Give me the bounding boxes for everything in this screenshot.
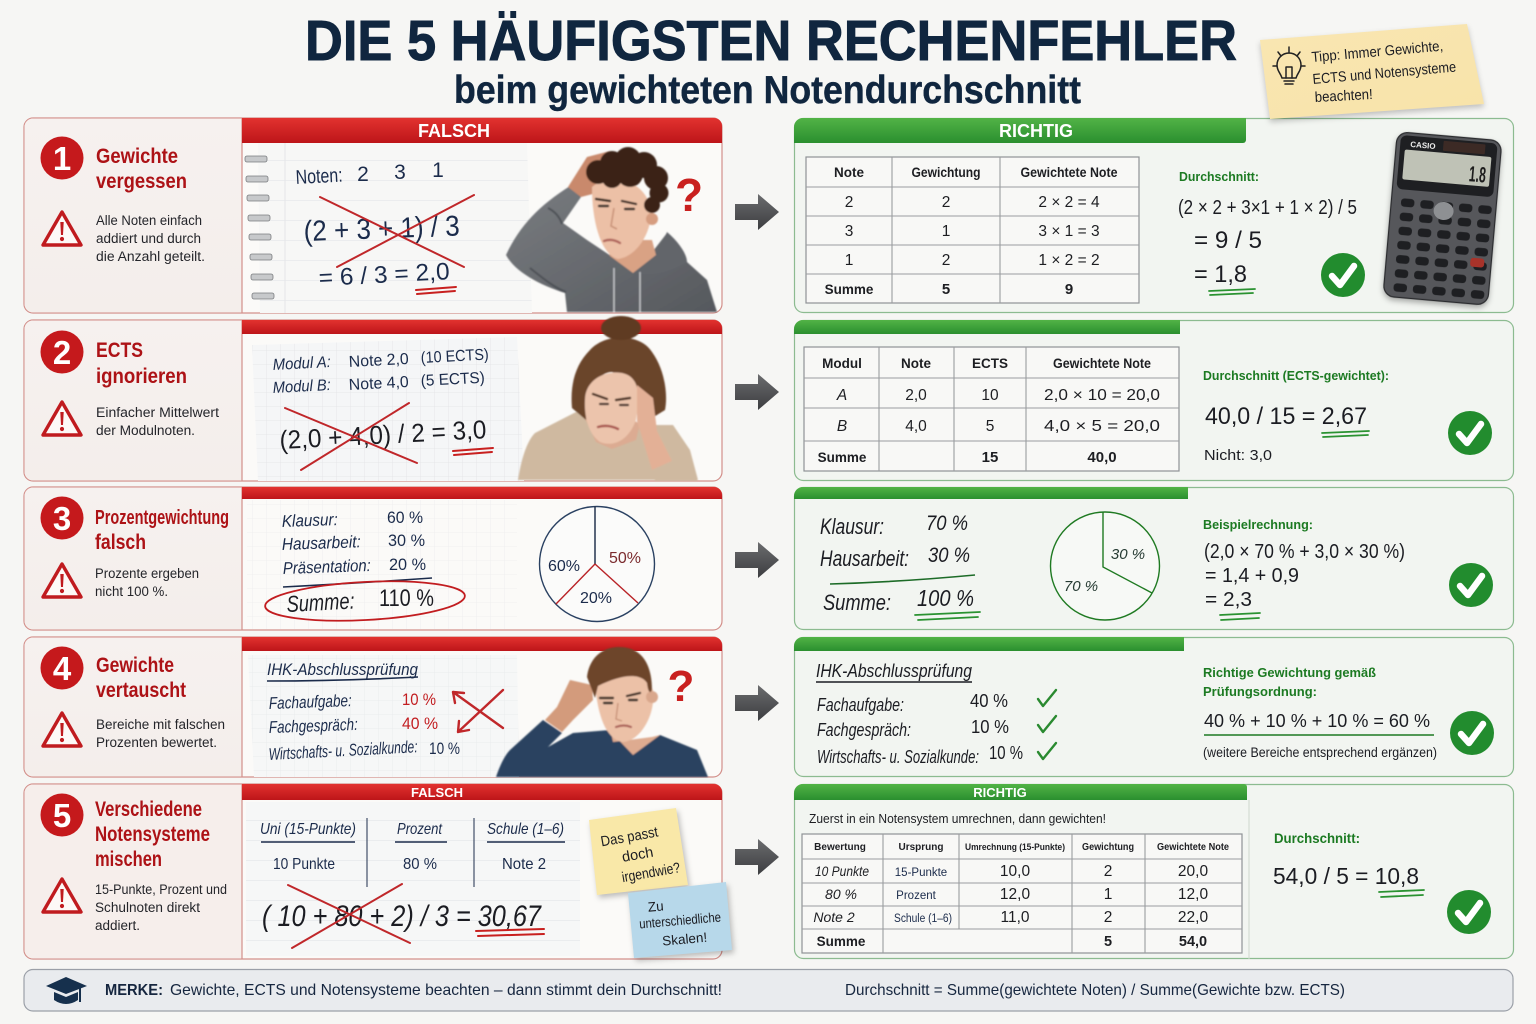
notebook 1: = 6 / 3 = 2,0 [318, 258, 450, 292]
heading 2 [96, 339, 187, 388]
richtig header 1 [794, 118, 1246, 143]
question mark 1: ? [675, 169, 703, 221]
icon: check 3 [1449, 563, 1493, 607]
heading 1: vergessen [96, 170, 187, 193]
calculation 3: = 1,4 + 0,9 [1205, 565, 1299, 587]
table 5: 10,0 [1000, 863, 1030, 880]
icon: warning 1 [43, 212, 81, 245]
calculation 5: Durchschnitt: [1274, 830, 1360, 846]
heading 1: Gewichte [96, 145, 178, 168]
falsch header 5: FALSCH [411, 785, 463, 800]
sticky note blue: unterschiedliche [639, 909, 722, 932]
sticky note yellow: doch [621, 845, 655, 866]
description 5 [95, 882, 227, 933]
table 2: 4,0 × 5 = 20,0 [1044, 418, 1160, 435]
note paper 2: (2,0 + 4,0) / 2 = 3,0 [279, 414, 487, 455]
heading 4 [96, 654, 186, 702]
panel: error 1 [24, 118, 722, 313]
table 5: 2 [1104, 909, 1112, 926]
calculation 4: Prüfungsordnung: [1203, 684, 1317, 699]
calculation 5 [1273, 830, 1424, 897]
mixed systems note: 80 % [403, 856, 437, 873]
description 4: Bereiche mit falschen [96, 717, 225, 732]
weights list 3: 20 % [389, 555, 426, 574]
icon: warning 5 [43, 879, 81, 912]
table 2: Modul [822, 356, 862, 371]
description 5: Schulnoten direkt [95, 900, 200, 915]
calculation 2: Nicht: 3,0 [1204, 447, 1272, 464]
table 2: ECTS [972, 356, 1008, 371]
exam weights wrong: IHK-Abschlussprüfung [267, 660, 418, 679]
heading 5: Verschiedene [95, 798, 202, 821]
notebook 1 [245, 143, 532, 313]
weights list 3: 30 % [388, 531, 425, 550]
mixed systems note: ( 10 + 80 + 2) / 3 = 30,67 [262, 900, 542, 933]
heading 5: mischen [95, 848, 162, 871]
number badge 4: 4 [53, 650, 72, 687]
description 4 [96, 717, 225, 750]
sticky note blue [628, 882, 732, 958]
correct weights list: Klausur: [820, 514, 884, 539]
exam weights wrong: Wirtschafts- u. Sozialkunde: [268, 737, 418, 764]
correct weights list: Summe: [823, 590, 891, 615]
number badge 4 [40, 646, 84, 690]
table 5: 1 [1104, 886, 1112, 903]
table 1: Note [834, 165, 864, 180]
table 2: 4,0 [905, 418, 927, 435]
icon: check 1 [1321, 253, 1365, 297]
calculation 1: = 1,8 [1194, 261, 1247, 288]
table 1 [806, 157, 1139, 303]
calculation 1 [1178, 169, 1357, 295]
richtig header 5 [794, 784, 1247, 800]
mixed systems note: Uni (15-Punkte) [260, 821, 356, 838]
exam weights correct: Fachaufgabe: [817, 695, 904, 715]
exam weights correct [816, 661, 1056, 767]
calculation 1: (2 × 2 + 3×1 + 1 × 2) / 5 [1178, 197, 1357, 219]
note paper 2: Note 2,0 [348, 351, 409, 371]
calculation 2: 40,0 / 15 = 2,67 [1205, 403, 1367, 430]
table 5: Schule (1–6) [894, 913, 952, 925]
sticky note yellow: irgendwie? [621, 860, 681, 886]
calculator [1383, 132, 1502, 305]
table 1: Summe [825, 282, 874, 297]
heading 4: Gewichte [96, 654, 174, 677]
note paper 2 [252, 337, 524, 481]
notebook 1: (2 + 3 + 1) / 3 [303, 211, 460, 248]
pie chart wrong: 50% [609, 550, 641, 567]
table 1: 2 [845, 194, 853, 211]
weights list 3: Summe: [286, 587, 355, 617]
table 5 [802, 834, 1242, 953]
arrow 5 [735, 839, 779, 875]
correct weights list: 100 % [917, 585, 974, 611]
note paper 2: (5 ECTS) [420, 370, 485, 390]
tip sticky note: beachten! [1314, 87, 1373, 106]
table 1: 3 [845, 223, 853, 240]
table 5: 2 [1104, 863, 1112, 880]
description 5: addiert. [95, 918, 140, 933]
correct weights list [820, 512, 980, 620]
formula: Durchschnitt = Summe(gewichtete Noten) / Summe(Gewichte bzw. ECTS) [845, 982, 1345, 999]
calculation 3 [1203, 517, 1405, 620]
takeaway text: MERKE: [105, 982, 163, 999]
icon: check 4 [1450, 711, 1494, 755]
table 5: Summe [817, 934, 866, 949]
title: DIE 5 HÄUFIGSTEN RECHENFEHLER [305, 9, 1237, 73]
sticky note blue: Skalen! [662, 930, 708, 949]
number badge 2 [40, 330, 84, 374]
tip sticky note: ECTS und Notensysteme [1312, 59, 1457, 88]
tip sticky note: Tipp: Immer Gewichte, [1311, 39, 1444, 66]
title [305, 9, 1237, 112]
heading 3 [95, 507, 229, 554]
richtig header 1: RICHTIG [999, 121, 1073, 141]
description 1: die Anzahl geteilt. [96, 249, 205, 264]
correct weights list: Hausarbeit: [820, 546, 909, 571]
table 5: 80 % [825, 886, 857, 902]
calculation 4: (weitere Bereiche entsprechend ergänzen) [1203, 745, 1437, 760]
table 1: 1 × 2 = 2 [1038, 252, 1100, 269]
description 3 [95, 566, 199, 599]
falsch header 5 [242, 784, 722, 800]
arrow 3 [735, 542, 779, 578]
question mark 4: ? [668, 662, 694, 711]
table 5: Note 2 [813, 909, 855, 925]
heading 1 [96, 145, 187, 193]
red bar 3 [242, 487, 722, 499]
mixed systems note: 10 Punkte [273, 856, 335, 873]
table 1: 5 [942, 281, 950, 298]
table 1: 9 [1065, 281, 1073, 298]
panel: error 4 [24, 637, 722, 777]
icon: warning 4 [43, 713, 81, 746]
mixed systems note: Note 2 [502, 856, 546, 873]
calculation 4 [1203, 665, 1437, 760]
table 2: 15 [982, 449, 998, 466]
notebook 1: Noten: [295, 165, 343, 189]
calculator: CASIO [1410, 140, 1436, 151]
description 2: Einfacher Mittelwert [96, 405, 219, 420]
heading 5: Notensysteme [95, 823, 210, 846]
table 2: 5 [986, 418, 994, 435]
exam weights correct: 10 % [971, 717, 1009, 737]
panel: solution 5 [794, 784, 1514, 959]
title: beim gewichteten Notendurchschnitt [454, 69, 1081, 112]
number badge 1 [40, 136, 84, 180]
correct weights list: 30 % [928, 544, 970, 567]
tip sticky note [1260, 24, 1484, 119]
number badge 5 [40, 794, 84, 836]
arrow 2 [735, 374, 779, 410]
calculation 3: Beispielrechnung: [1203, 517, 1313, 532]
description 3: nicht 100 %. [95, 584, 168, 599]
table 1: 2 × 2 = 4 [1038, 194, 1100, 211]
table 2: 40,0 [1087, 449, 1117, 466]
person: confused man scratching head [496, 647, 708, 777]
icon: graduation cap [46, 977, 87, 1004]
table 5: 11,0 [1000, 909, 1030, 926]
panel: error 2 [24, 316, 722, 481]
sticky note blue: Zu [647, 898, 664, 915]
green bar 4 [794, 637, 1184, 651]
notebook 1: 1 [432, 159, 444, 182]
table 5: Gewichtete Note [1157, 842, 1229, 853]
calculation 4: 40 % + 10 % + 10 % = 60 % [1204, 711, 1430, 731]
note paper 2: Note 4,0 [348, 374, 409, 394]
notebook 1: 2 [357, 163, 369, 186]
table 1: 1 [845, 252, 853, 269]
table 2: A [836, 387, 847, 404]
note paper 2: (10 ECTS) [420, 346, 489, 367]
table 5: 5 [1104, 934, 1112, 950]
sticky note yellow [589, 808, 688, 895]
note paper 2: Modul A: [272, 354, 331, 374]
table 2 [804, 347, 1179, 471]
panel: solution 1 [794, 118, 1514, 312]
description 2 [96, 405, 219, 438]
arrow 1 [735, 194, 779, 230]
panel: solution 3 [794, 487, 1514, 630]
pie chart correct: 30 % [1111, 546, 1145, 563]
table 5: 12,0 [1178, 886, 1208, 903]
exam weights wrong: Fachaufgabe: [268, 691, 352, 713]
exam weights wrong: 10 % [429, 739, 460, 758]
weights list 3: Hausarbeit: [281, 532, 361, 554]
person: frustrated woman with hair bun [518, 316, 698, 481]
exam weights wrong: 40 % [402, 714, 438, 733]
number badge 3 [40, 496, 84, 540]
number badge 1: 1 [53, 140, 71, 177]
table 2: Summe [818, 450, 867, 465]
exam weights correct: Fachgespräch: [817, 720, 911, 740]
exam weights correct: Wirtschafts- u. Sozialkunde: [817, 747, 979, 767]
description 3: Prozente ergeben [95, 566, 199, 581]
person: confused young man in hoodie [506, 147, 717, 312]
weights list 3: 60 % [387, 508, 423, 527]
pie chart wrong: 20% [580, 590, 612, 607]
calculation 3: (2,0 × 70 % + 3,0 × 30 %) [1204, 541, 1405, 563]
mixed systems note [246, 802, 580, 956]
number badge 2: 2 [53, 334, 71, 371]
table 1: 2 [942, 252, 950, 269]
description 5: 15-Punkte, Prozent und [95, 882, 227, 897]
exam weights correct: 10 % [989, 743, 1023, 763]
calculation 2: Durchschnitt (ECTS-gewichtet): [1203, 368, 1389, 383]
green bar 3 [794, 487, 1188, 499]
table 1: Gewichtete Note [1020, 165, 1118, 180]
bottom takeaway bar [24, 970, 1513, 1011]
icon: warning 3 [43, 564, 81, 597]
table 5: Umrechnung (15-Punkte) [965, 842, 1065, 853]
table 5: 12,0 [1000, 886, 1030, 903]
calculator: 1.8 [1468, 161, 1487, 188]
table 5: 20,0 [1178, 863, 1208, 880]
table 5: Gewichtung [1082, 842, 1134, 853]
heading 2: ECTS [96, 339, 143, 362]
calculation 4: Richtige Gewichtung gemäß [1203, 665, 1376, 680]
table 5: 10 Punkte [815, 863, 869, 879]
arrow 4 [735, 685, 779, 721]
table 1: 2 [942, 194, 950, 211]
mixed systems note: Prozent [397, 821, 442, 838]
heading 3: Prozentgewichtung [95, 507, 229, 529]
number badge 3: 3 [53, 500, 71, 537]
falsch header 1: FALSCH [418, 121, 490, 141]
red bar 2 [242, 320, 722, 334]
table 1: Gewichtung [912, 165, 980, 180]
calculation 3: = 2,3 [1205, 589, 1252, 611]
green bar 2 [794, 320, 1180, 334]
instruction 5: Zuerst in ein Notensystem umrechnen, dann gewichten! [809, 811, 1106, 826]
weights list 3: 110 % [379, 585, 434, 612]
heading 4: vertauscht [96, 679, 186, 702]
table 2: 2,0 × 10 = 20,0 [1044, 387, 1160, 404]
calculation 1: Durchschnitt: [1179, 169, 1259, 184]
exam weights wrong [248, 655, 519, 777]
description 1: addiert und durch [96, 231, 201, 246]
weights list 3: Präsentation: [282, 556, 371, 578]
calculation 1: = 9 / 5 [1194, 227, 1262, 254]
icon: check 2 [1448, 411, 1492, 455]
table 5: Bewertung [814, 842, 866, 853]
mixed systems note: Schule (1–6) [487, 821, 564, 838]
table 1: 1 [942, 223, 950, 240]
panel: error 3 [24, 487, 722, 630]
heading 5 [95, 798, 210, 871]
number badge 5: 5 [53, 797, 71, 834]
note paper 2: Modul B: [272, 377, 331, 397]
table 1: 3 × 1 = 3 [1038, 223, 1100, 240]
notebook 1: 3 [394, 161, 406, 184]
table 2: B [837, 418, 847, 435]
falsch header 1 [242, 118, 722, 143]
pie chart correct [1050, 512, 1160, 620]
weights list 3 [247, 500, 517, 629]
panel: solution 4 [794, 637, 1514, 776]
table 5: 22,0 [1178, 909, 1208, 926]
exam weights correct: IHK-Abschlussprüfung [816, 661, 972, 681]
table 2: Gewichtete Note [1053, 356, 1151, 371]
sticky note yellow: Das passt [600, 824, 659, 850]
heading 3: falsch [95, 531, 146, 554]
panel: solution 2 [794, 320, 1514, 480]
exam weights correct: 40 % [970, 691, 1008, 711]
table 5: 15-Punkte [895, 867, 947, 879]
table 5: Prozent [896, 890, 937, 902]
pie chart wrong: 60% [548, 558, 580, 575]
panel: error 5 [24, 784, 732, 959]
table 2: 10 [981, 387, 999, 404]
table 5: Ursprung [898, 842, 944, 853]
pie chart correct: 70 % [1064, 578, 1098, 595]
correct weights list: 70 % [926, 512, 968, 535]
description 1 [96, 213, 205, 264]
icon: warning 2 [43, 402, 81, 435]
description 1: Alle Noten einfach [96, 213, 202, 228]
calculation 2 [1203, 368, 1389, 464]
heading 2: ignorieren [96, 365, 187, 388]
table 2: 2,0 [905, 387, 927, 404]
description 4: Prozenten bewertet. [96, 735, 217, 750]
table 5: 54,0 [1179, 934, 1207, 950]
exam weights wrong: 10 % [402, 690, 436, 709]
icon: check 5 [1447, 890, 1491, 934]
description 2: der Modulnoten. [96, 423, 195, 438]
table 2: Note [901, 356, 931, 371]
richtig header 5: RICHTIG [973, 785, 1027, 800]
calculation 5: 54,0 / 5 = 10,8 [1273, 863, 1419, 889]
weights list 3: Klausur: [281, 510, 338, 531]
exam weights wrong: Fachgespräch: [268, 715, 358, 737]
icon: light bulb [1273, 47, 1305, 84]
red bar 4 [242, 637, 722, 651]
bottom takeaway bar: Gewichte, ECTS und Notensysteme beachten – dann stimmt dein Durchschnitt! [170, 982, 722, 999]
pie chart wrong [540, 506, 654, 622]
